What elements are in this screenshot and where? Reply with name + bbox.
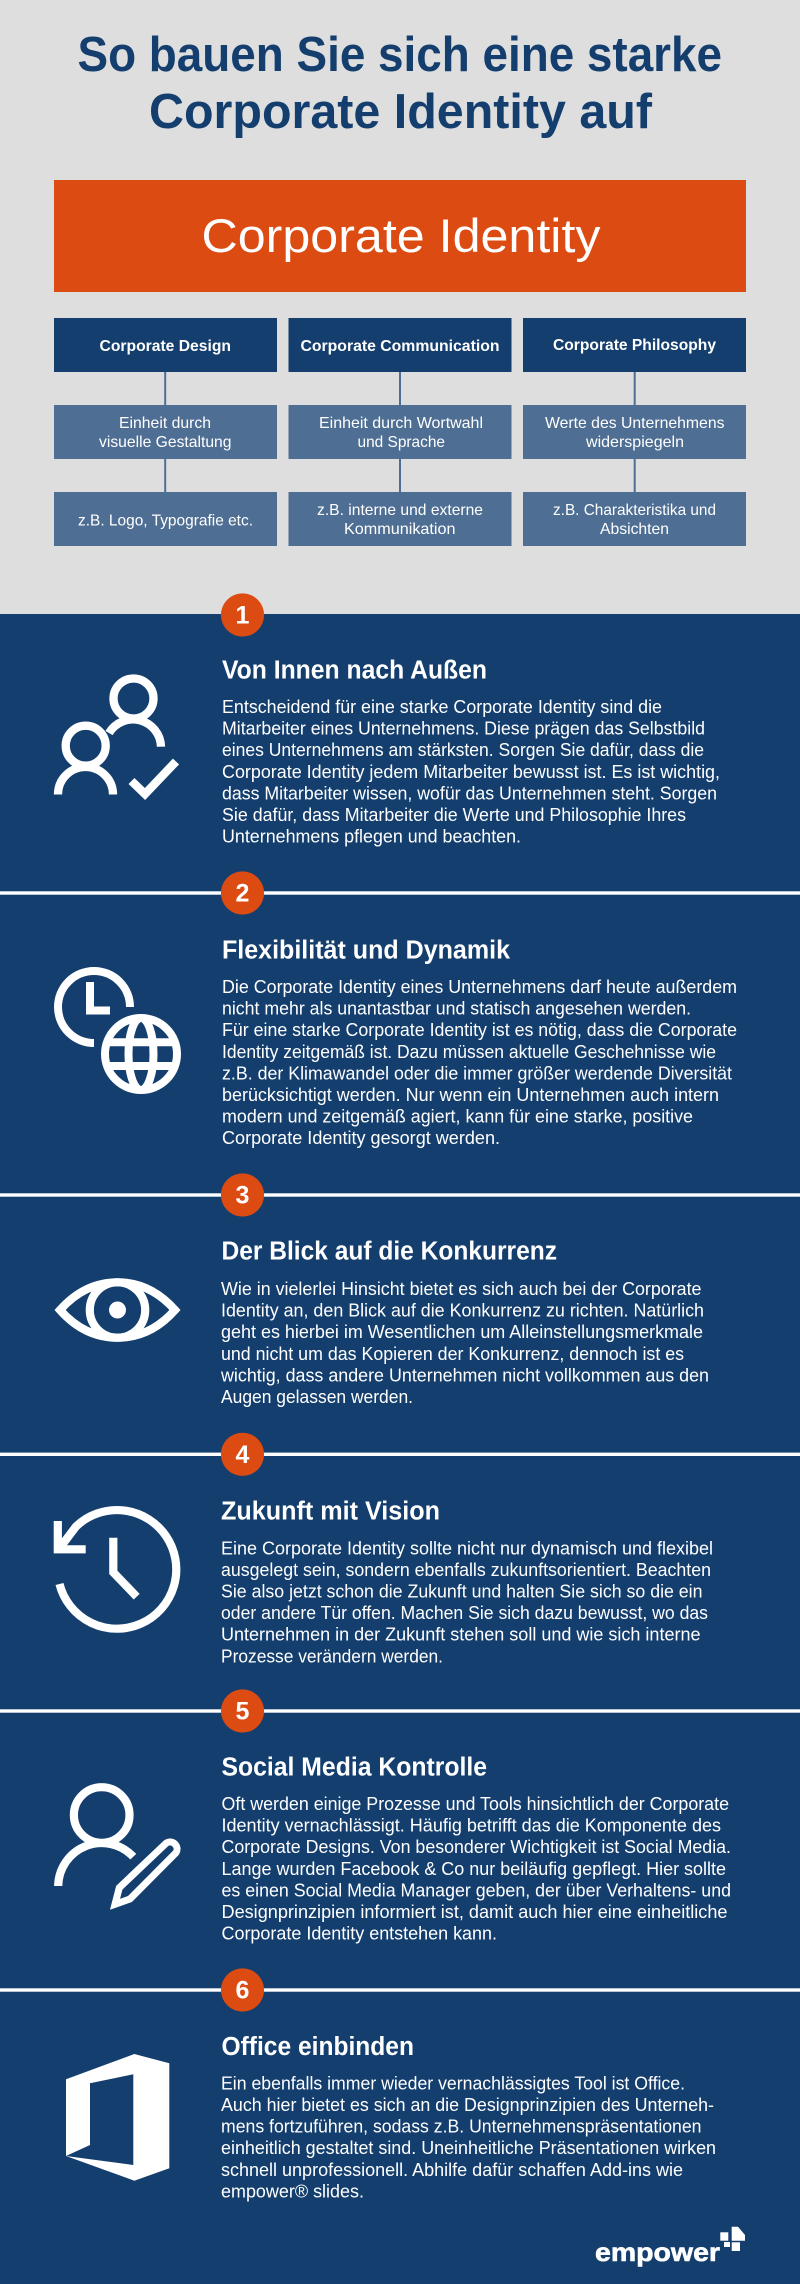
body text: eines Unternehmens am stärksten. Sorgen Sie dafür, dass die bbox=[222, 740, 704, 760]
body text: Mitarbeiter eines Unternehmens. Diese prägen das Selbstbild bbox=[222, 719, 705, 739]
body text: Corporate Identity entstehen kann. bbox=[222, 1924, 497, 1944]
body text: Wie in vielerlei Hinsicht bietet es sich auch bei der Corporate bbox=[221, 1279, 702, 1299]
body text bbox=[220, 1279, 709, 1407]
column: Corporate Philosophy: widerspiegeln bbox=[585, 434, 684, 451]
column: Corporate Design: z.B. Logo, Typografie etc. bbox=[78, 512, 253, 530]
body text: z.B. der Klimawandel oder die immer größer werdende Diversität bbox=[222, 1063, 732, 1083]
icon: clock with back arrow bbox=[58, 1510, 176, 1629]
section 4: Zukunft mit Vision bbox=[58, 1433, 713, 1666]
section 5: Social Media Kontrolle bbox=[58, 1689, 731, 1944]
body text bbox=[221, 2073, 716, 2201]
body text: Identity zeitgemäß ist. Dazu müssen aktuelle Geschehnisse wie bbox=[222, 1042, 716, 1062]
number badge 2: 2 bbox=[236, 880, 249, 908]
body text: nicht mehr als unantastbar und statisch angesehen werden. bbox=[222, 999, 691, 1019]
number badge 2 bbox=[221, 871, 264, 915]
panel: corporate identity diagram bbox=[54, 180, 746, 546]
body text: Eine Corporate Identity sollte nicht nur dynamisch und flexibel bbox=[221, 1538, 713, 1558]
number badge 4 bbox=[221, 1433, 264, 1476]
section 2: Flexibilität und Dynamik bbox=[58, 871, 737, 1148]
body text: empower® slides. bbox=[221, 2181, 364, 2201]
heading: Flexibilität und Dynamik bbox=[222, 936, 511, 964]
column: Corporate Communication: z.B. interne und externe bbox=[317, 502, 483, 519]
body text: Ein ebenfalls immer wieder vernachlässigtes Tool ist Office. bbox=[221, 2073, 685, 2093]
section 3: Der Blick auf die Konkurrenz bbox=[60, 1173, 709, 1407]
body text: Entscheidend für eine starke Corporate Identity sind die bbox=[222, 697, 662, 717]
logo: empower bbox=[595, 2227, 745, 2267]
heading: Office einbinden bbox=[222, 2033, 414, 2061]
body text: wichtig, dass andere Unternehmen nicht vollkommen aus den bbox=[220, 1365, 709, 1385]
logo: empower: empower bbox=[595, 2237, 720, 2267]
number badge 3 bbox=[221, 1173, 264, 1217]
body text: Lange wurden Facebook & Co nur beiläufig gepflegt. Hier sollte bbox=[222, 1859, 726, 1879]
column: Corporate Communication: Einheit durch Wortwahl bbox=[319, 415, 483, 432]
body text bbox=[222, 977, 737, 1148]
column: Corporate Philosophy: z.B. Charakteristika und bbox=[553, 502, 716, 519]
column: Corporate Philosophy: Corporate Philosophy bbox=[553, 337, 716, 354]
body text: Corporate Designs. Von besonderer Wichtigkeit ist Social Media. bbox=[222, 1837, 731, 1857]
body text: Die Corporate Identity eines Unternehmens darf heute außerdem bbox=[222, 977, 737, 997]
section 1: Von Innen nach Außen bbox=[58, 593, 720, 847]
body text: einheitlich gestaltet sind. Uneinheitliche Präsentationen wirken bbox=[221, 2138, 716, 2158]
column: Corporate Communication: Corporate Communication bbox=[300, 338, 500, 355]
body text: Unternehmen in der Zukunft stehen soll und wie sich interne bbox=[221, 1625, 700, 1645]
icon: eye bbox=[60, 1282, 175, 1338]
icon: person with pencil bbox=[58, 1787, 177, 1904]
number badge 1: 1 bbox=[236, 602, 250, 630]
body text: berücksichtigt werden. Nur wenn ein Unternehmen auch intern bbox=[222, 1085, 719, 1105]
number badge 5: 5 bbox=[236, 1698, 250, 1726]
column: Corporate Philosophy: Werte des Unternehmens bbox=[545, 415, 724, 432]
body text: oder andere Tür offen. Machen Sie sich dazu bewusst, wo das bbox=[221, 1603, 708, 1623]
body text: Corporate Identity gesorgt werden. bbox=[222, 1128, 500, 1148]
column: Corporate Philosophy: Absichten bbox=[600, 521, 669, 538]
number badge 3: 3 bbox=[236, 1182, 249, 1210]
body text: Unternehmens pflegen und beachten. bbox=[222, 827, 521, 847]
body text: Augen gelassen werden. bbox=[221, 1387, 413, 1407]
column: Corporate Design bbox=[54, 318, 277, 546]
number badge 5 bbox=[221, 1689, 264, 1733]
body text: dass Mitarbeiter wissen, wofür das Unternehmen steht. Sorgen bbox=[222, 783, 717, 803]
heading: Von Innen nach Außen bbox=[222, 656, 487, 684]
number badge 6 bbox=[221, 1968, 264, 2012]
body text: Designprinzipien informiert ist, damit auch hier eine einheitliche bbox=[222, 1902, 728, 1922]
body text: Corporate Identity jedem Mitarbeiter bewusst ist. Es ist wichtig, bbox=[222, 762, 720, 782]
body text bbox=[222, 1794, 731, 1944]
banner: Corporate Identity bbox=[54, 180, 746, 292]
heading: Der Blick auf die Konkurrenz bbox=[222, 1238, 557, 1266]
body text: geht es hierbei im Wesentlichen um Alleinstellungsmerkmale bbox=[221, 1322, 703, 1342]
icon: people with check bbox=[58, 678, 176, 794]
body text: und nicht um das Kopieren der Konkurrenz, dennoch ist es bbox=[221, 1344, 684, 1364]
body text: Prozesse verändern werden. bbox=[221, 1646, 443, 1666]
column: Corporate Communication: und Sprache bbox=[358, 434, 445, 451]
body text bbox=[221, 1538, 713, 1666]
panel: navy background bbox=[0, 614, 800, 2284]
number badge 1 bbox=[221, 593, 264, 637]
body text: modern und zeitgemäß agiert, kann für eine starke, positive bbox=[222, 1107, 693, 1127]
body text: Oft werden einige Prozesse und Tools hinsichtlich der Corporate bbox=[222, 1794, 729, 1814]
body text: Identity vernachlässigt. Häufig betrifft das die Komponente des bbox=[222, 1816, 721, 1836]
number badge 4: 4 bbox=[236, 1441, 250, 1469]
title: So bauen Sie sich eine starke bbox=[78, 28, 722, 82]
column: Corporate Philosophy bbox=[523, 318, 746, 546]
body text: es einen Social Media Manager geben, der über Verhaltens- und bbox=[222, 1880, 731, 1900]
body text bbox=[222, 697, 720, 847]
heading: Zukunft mit Vision bbox=[221, 1498, 440, 1526]
icon: office logo bbox=[66, 2054, 169, 2181]
column: Corporate Design: Corporate Design bbox=[100, 338, 231, 355]
body text: Sie also jetzt schon die Zukunft und halten Sie sich so die ein bbox=[221, 1582, 702, 1602]
body text: Für eine starke Corporate Identity ist es nötig, dass die Corporate bbox=[222, 1020, 737, 1040]
title: Corporate Identity auf bbox=[149, 85, 653, 139]
body text: Sie dafür, dass Mitarbeiter die Werte und Philosophie Ihres bbox=[222, 805, 686, 825]
icon: clock and globe bbox=[58, 971, 177, 1090]
banner: Corporate Identity: Corporate Identity bbox=[202, 209, 601, 262]
title bbox=[78, 28, 722, 139]
column: Corporate Design: visuelle Gestaltung bbox=[99, 434, 232, 451]
body text: Identity an, den Blick auf die Konkurrenz zu richten. Natürlich bbox=[221, 1301, 704, 1321]
column: Corporate Communication bbox=[288, 318, 512, 546]
section 6: Office einbinden bbox=[66, 1968, 716, 2201]
number badge 6: 6 bbox=[236, 1977, 249, 2005]
body text: ausgelegt sein, sondern ebenfalls zukunftsorientiert. Beachten bbox=[221, 1560, 711, 1580]
heading: Social Media Kontrolle bbox=[222, 1754, 487, 1782]
body text: mens fortzuführen, sodass z.B. Unternehmenspräsentationen bbox=[221, 2117, 702, 2137]
body text: Auch hier bietet es sich an die Designprinzipien des Unterneh- bbox=[221, 2095, 714, 2115]
column: Corporate Design: Einheit durch bbox=[119, 415, 211, 432]
body text: schnell unprofessionell. Abhilfe dafür schaffen Add-ins wie bbox=[221, 2160, 683, 2180]
column: Corporate Communication: Kommunikation bbox=[344, 521, 456, 538]
